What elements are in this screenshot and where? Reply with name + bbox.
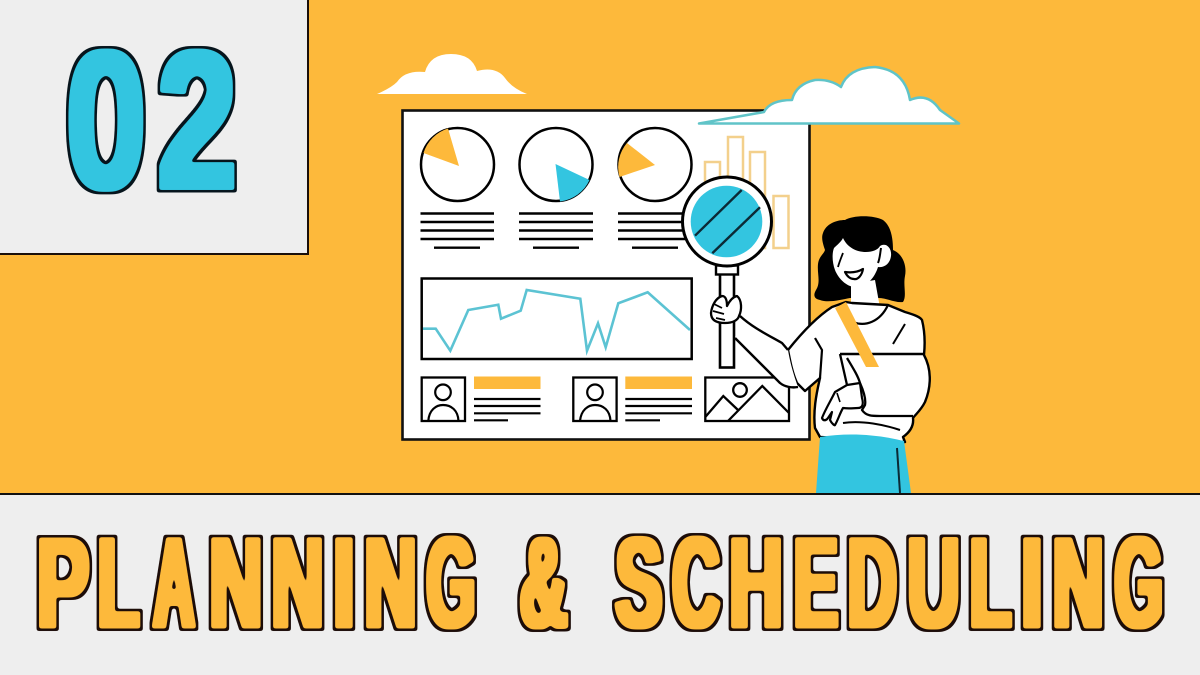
title: N — [271, 512, 324, 655]
hair — [814, 216, 906, 302]
profile card 2 — [573, 376, 692, 421]
neck — [851, 280, 880, 308]
title: N — [1052, 512, 1104, 655]
yellow strap — [835, 302, 879, 367]
pie chart 1 — [421, 128, 494, 201]
blue skirt — [816, 434, 911, 493]
icon: magnifying glass — [682, 177, 772, 368]
bar chart — [705, 137, 788, 248]
section number — [66, 12, 237, 229]
icon: outlined cloud — [699, 67, 959, 124]
face — [833, 238, 891, 287]
waist crease — [843, 422, 900, 430]
title: N — [209, 512, 263, 655]
title: E — [793, 512, 838, 655]
title: C — [672, 512, 719, 655]
title: D — [848, 512, 897, 655]
hand on hip — [822, 383, 863, 425]
shoulder crease — [893, 324, 905, 344]
sleeve fold — [815, 338, 822, 378]
title: P — [37, 512, 89, 655]
title: G — [427, 512, 475, 655]
hand on handle — [711, 296, 741, 323]
title: I — [333, 512, 355, 655]
collar — [853, 305, 888, 324]
title: A — [154, 512, 194, 655]
smile — [845, 269, 863, 279]
image placeholder — [705, 378, 789, 421]
icon: white cloud — [377, 54, 527, 94]
pie chart 2 — [520, 128, 592, 202]
line chart — [422, 278, 692, 359]
section number: 2 — [157, 12, 237, 229]
character: presenter — [711, 216, 930, 493]
raised arm — [735, 316, 798, 387]
title: H — [729, 512, 783, 655]
title — [36, 512, 1165, 655]
torso and sleeve — [788, 302, 930, 442]
text lines under pies — [420, 214, 692, 248]
section number: 0 — [66, 12, 146, 229]
panel: title band — [0, 493, 1200, 675]
title: S — [615, 512, 662, 655]
illustration: dashboard and presenter — [377, 54, 960, 493]
title: N — [364, 512, 417, 655]
panel: number box — [0, 0, 309, 255]
panel: dashboard board — [402, 110, 810, 440]
title: G — [1115, 512, 1163, 655]
title: & — [520, 512, 567, 655]
profile card 1 — [422, 376, 540, 421]
forearm line and tablet — [840, 353, 924, 355]
title: I — [1021, 512, 1043, 655]
title: U — [907, 512, 960, 655]
title: L — [98, 512, 139, 655]
pie chart 3 — [618, 128, 692, 201]
title: L — [970, 512, 1011, 655]
